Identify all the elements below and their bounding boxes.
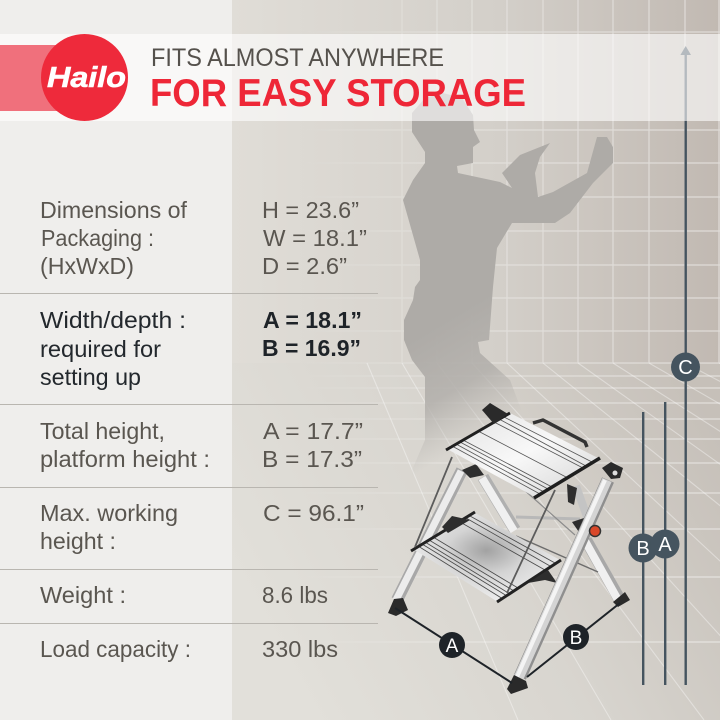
row: width and depth: setting up bbox=[40, 364, 141, 390]
logo: Hailo: Hailo bbox=[47, 62, 126, 94]
title: FOR EASY STORAGE bbox=[150, 72, 526, 115]
floor dimension A: A bbox=[446, 636, 459, 657]
row: weight: 8.6 lbs bbox=[262, 582, 328, 608]
rods bbox=[415, 457, 555, 593]
row: dimensions of packaging: (HxWxD) bbox=[40, 253, 134, 279]
line A bbox=[664, 402, 666, 685]
badge A: A bbox=[658, 534, 672, 556]
back legs bbox=[396, 470, 620, 600]
height lines bbox=[642, 46, 691, 685]
floor dimension A bbox=[395, 608, 512, 683]
feet bbox=[388, 592, 630, 694]
row: width and depth: Width/depth : bbox=[40, 307, 186, 333]
title bbox=[150, 44, 526, 115]
front leg bbox=[517, 480, 608, 677]
line C with arrow bbox=[680, 46, 691, 685]
badge A bbox=[650, 530, 680, 558]
row: width and depth: required for bbox=[40, 336, 161, 362]
upper step bbox=[446, 403, 623, 535]
floor dimension B bbox=[527, 603, 620, 677]
row: total and platform height: B = 17.3” bbox=[262, 446, 362, 472]
row: width and depth: A = 18.1” bbox=[263, 307, 362, 333]
row: weight: Weight : bbox=[40, 582, 126, 608]
badge C: C bbox=[678, 357, 693, 379]
specification table bbox=[0, 197, 378, 662]
line B bbox=[642, 412, 644, 685]
row: total and platform height: A = 17.7” bbox=[263, 418, 363, 444]
badge B bbox=[628, 534, 658, 562]
row: total and platform height: Total height, bbox=[40, 418, 165, 444]
row: max working height: C = 96.1” bbox=[263, 500, 364, 526]
silhouette: man drilling bbox=[403, 93, 613, 530]
row: load capacity bbox=[40, 636, 338, 662]
step stool bbox=[388, 403, 630, 694]
row: max working height bbox=[40, 500, 364, 554]
row: total and platform height bbox=[40, 418, 363, 472]
red button bbox=[590, 526, 600, 536]
row: dimensions of packaging: Packaging : bbox=[41, 225, 154, 251]
lower step bbox=[411, 512, 561, 602]
row: weight bbox=[40, 582, 328, 608]
row: width and depth bbox=[40, 307, 362, 390]
row: max working height: height : bbox=[40, 528, 116, 554]
header band bbox=[0, 34, 720, 121]
row: load capacity: 330 lbs bbox=[262, 636, 338, 662]
row: total and platform height: platform height : bbox=[40, 446, 210, 472]
logo: Hailo bbox=[41, 34, 128, 121]
badge B: B bbox=[636, 538, 650, 560]
row: dimensions of packaging bbox=[40, 197, 367, 279]
pink tab bbox=[0, 45, 60, 111]
row: max working height: Max. working bbox=[40, 500, 178, 526]
row: dimensions of packaging: Dimensions of bbox=[40, 197, 188, 223]
row: width and depth: B = 16.9” bbox=[262, 335, 361, 361]
floor dimension B: B bbox=[570, 628, 582, 649]
title: FITS ALMOST ANYWHERE bbox=[151, 44, 444, 72]
badge C bbox=[671, 352, 700, 382]
row: dimensions of packaging: D = 2.6” bbox=[262, 253, 347, 279]
row: dimensions of packaging: H = 23.6” bbox=[262, 197, 359, 223]
row: dimensions of packaging: W = 18.1” bbox=[263, 225, 367, 251]
row: load capacity: Load capacity : bbox=[40, 636, 191, 662]
